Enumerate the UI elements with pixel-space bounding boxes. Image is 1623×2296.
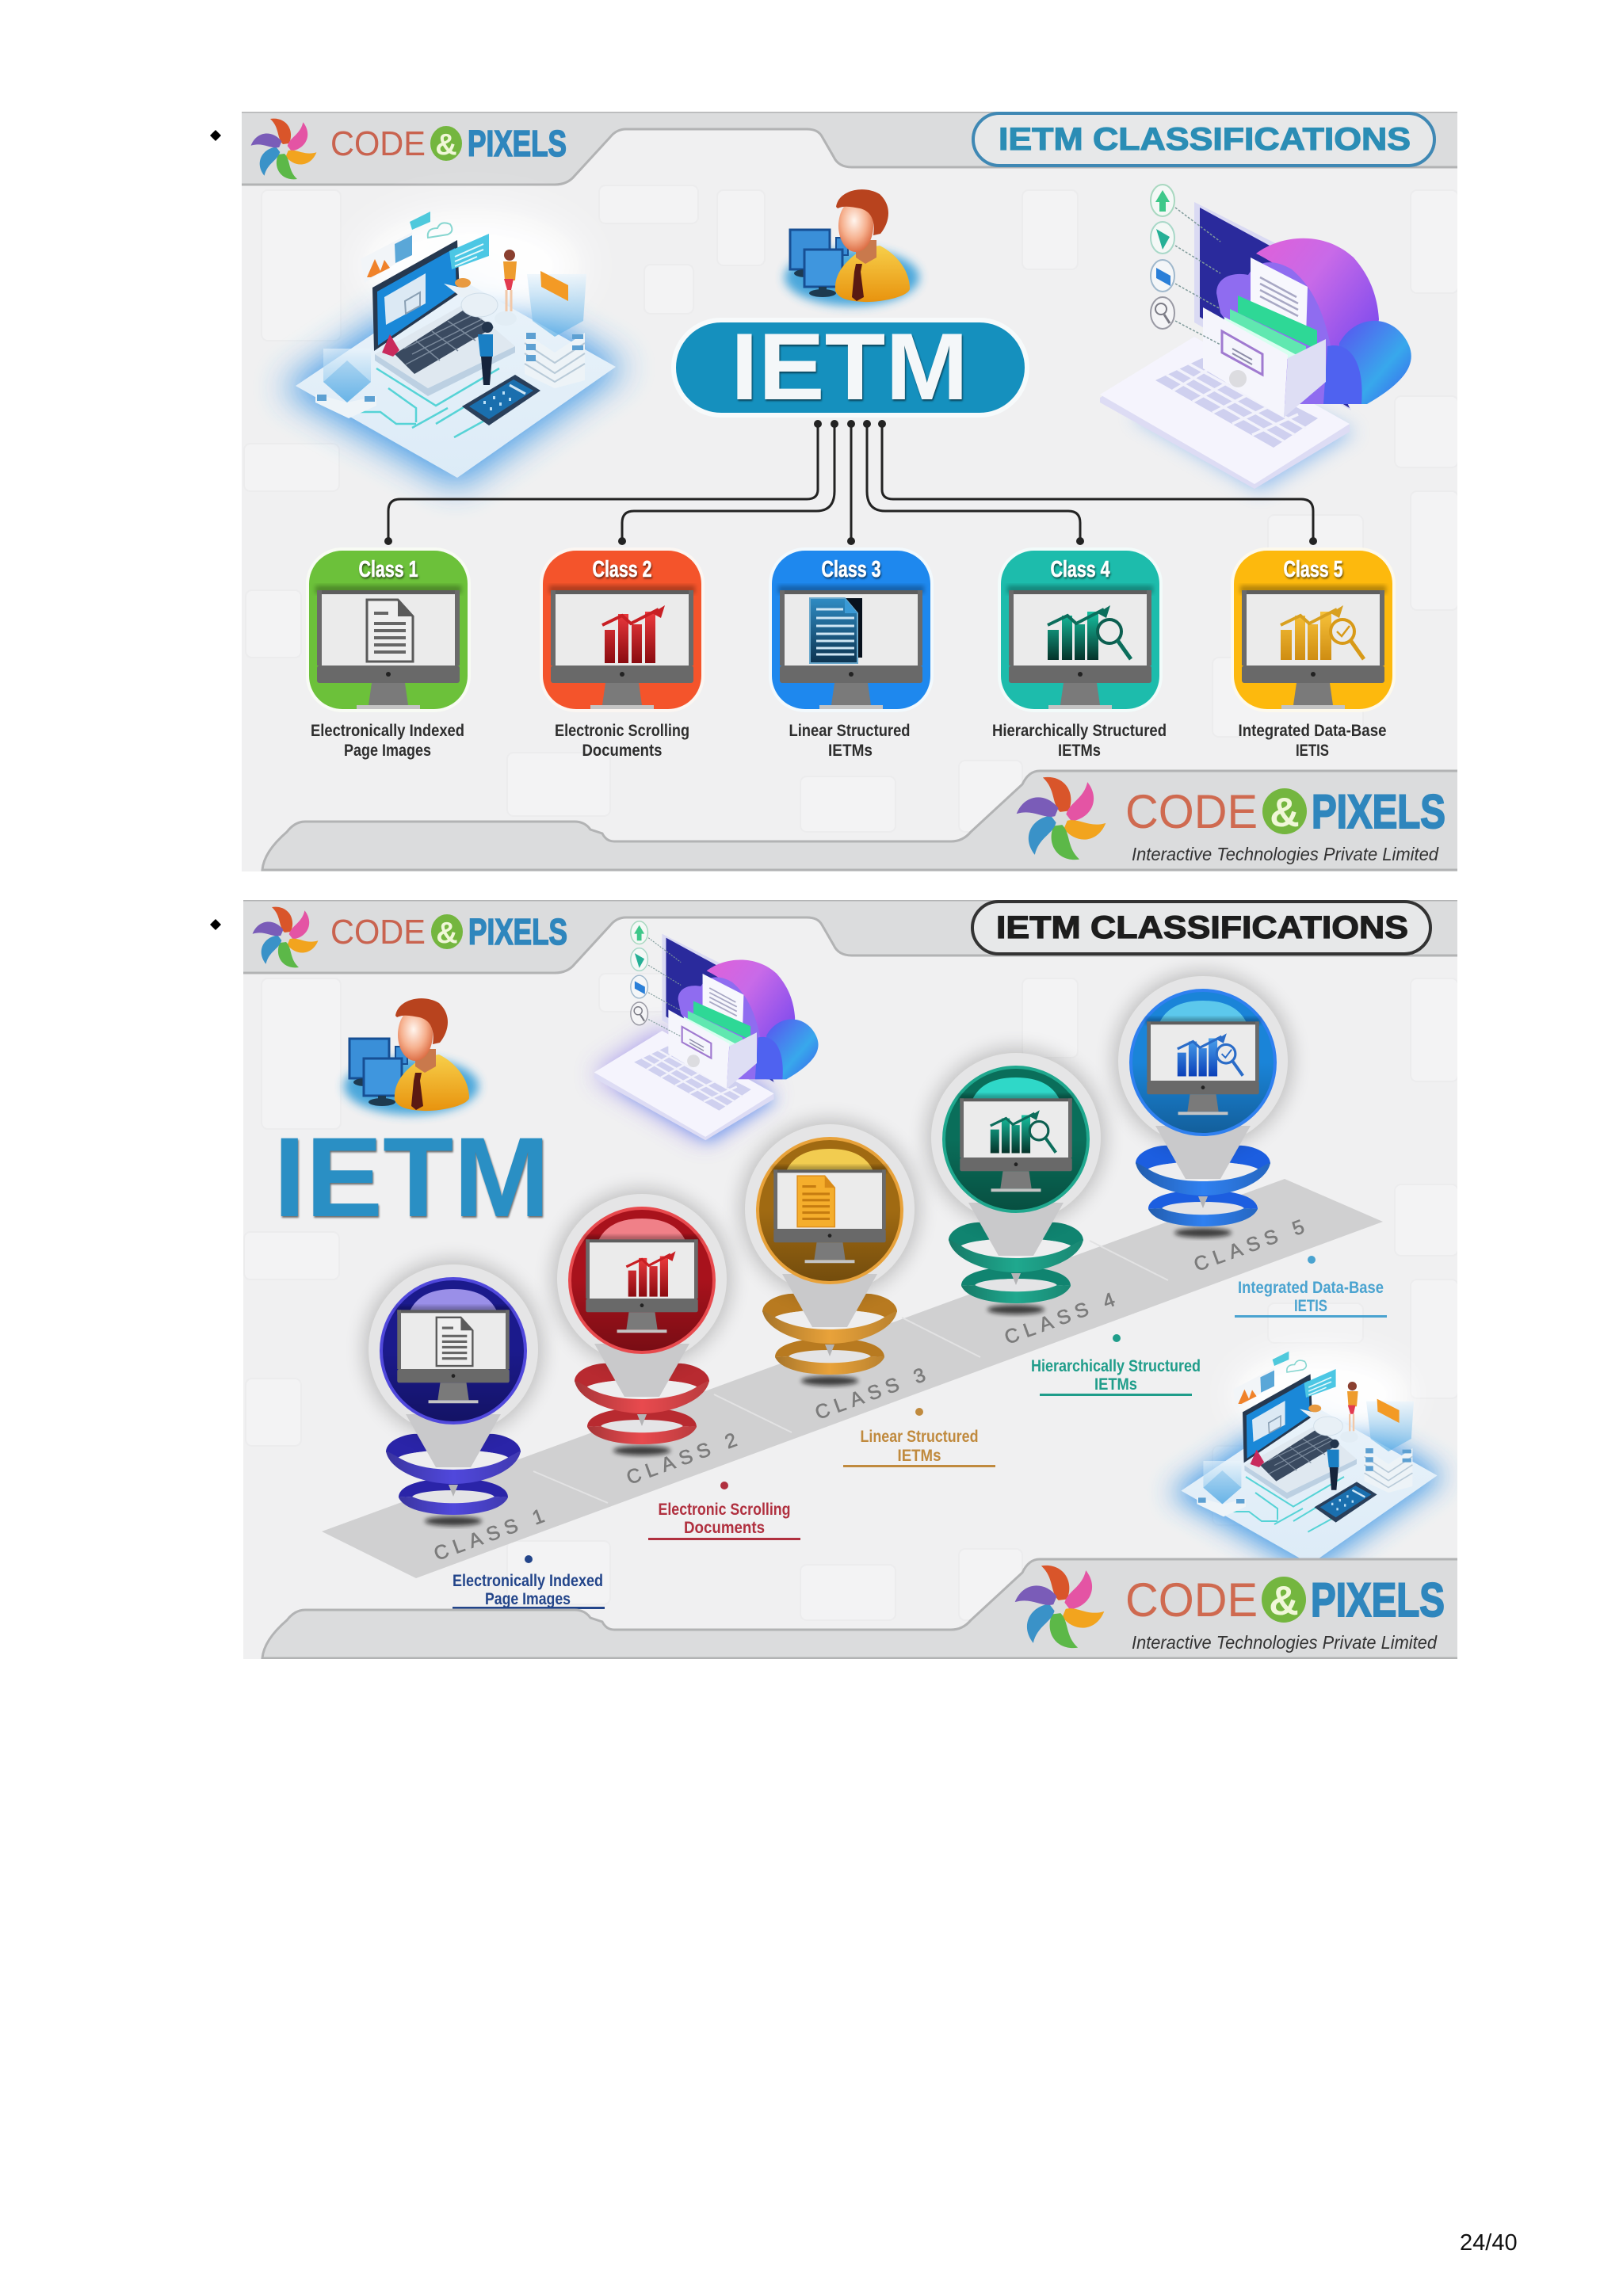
- panel: IETM class roadmap: [236, 900, 1466, 1659]
- label: CLASS 3: CLASS 3: [812, 1363, 929, 1425]
- logo: Code and Pixels footer: PIXELS: [1312, 785, 1445, 838]
- text: Class 3 description: IETMs: [828, 742, 873, 760]
- card: Class 4: [999, 549, 1161, 711]
- text: Class 2 callout: Electronic Scrolling: [658, 1501, 791, 1519]
- label: CLASS 2: CLASS 2: [624, 1428, 740, 1489]
- illustration: isometric laptop workspace: [1170, 1350, 1445, 1572]
- logo: Code and Pixels footer: PIXELS: [1311, 1573, 1445, 1627]
- text: Class 1 callout: Electronically Indexed: [453, 1572, 603, 1590]
- heading: IETM: IETM: [273, 1115, 550, 1241]
- pin: Class 4: [926, 1048, 1106, 1314]
- text: Class 3 callout: [843, 1408, 995, 1467]
- logo: Code and Pixels footer: [1014, 1566, 1445, 1653]
- logo: Code and Pixels header: CODE: [330, 124, 426, 163]
- footer band: [262, 1559, 1466, 1658]
- pin: Class 1: [364, 1260, 543, 1526]
- text: Class 5 callout: IETIS: [1294, 1297, 1327, 1315]
- card: Class 2: [541, 549, 703, 711]
- title pill: IETM CLASSIFICATIONS: [999, 122, 1411, 157]
- text: Class 3 callout: Linear Structured: [861, 1428, 978, 1446]
- illustration: cloud file drawer laptop: [1100, 185, 1411, 491]
- text: Class 3 description: Linear Structured: [789, 722, 910, 740]
- pin: Class 3: [740, 1119, 919, 1386]
- illustration: cloud file drawer laptop: [594, 921, 819, 1142]
- text: Class 2 callout: Documents: [684, 1519, 765, 1537]
- text: Class 5 callout: Integrated Data-Base: [1238, 1279, 1384, 1297]
- text: Class 1 callout: Page Images: [485, 1590, 571, 1608]
- label: CLASS 4: CLASS 4: [1002, 1288, 1118, 1349]
- logo: Code and Pixels header: &: [435, 128, 457, 162]
- card: Class 1: Class 1: [358, 557, 418, 582]
- text: Class 1 description: Electronically Indexed: [311, 722, 464, 740]
- logo: Code and Pixels header: PIXELS: [468, 123, 567, 164]
- logo: Code and Pixels footer: &: [1270, 790, 1300, 836]
- pin: Class 5: [1113, 971, 1293, 1238]
- text: Class 2 description: Documents: [582, 742, 663, 760]
- logo: Code and Pixels header: [252, 907, 567, 967]
- panel: IETM classifications tree: [236, 112, 1466, 871]
- text: Class 4 callout: Hierarchically Structured: [1031, 1357, 1201, 1375]
- text: Class 2 description: Electronic Scrolling: [555, 722, 689, 740]
- title pill: [972, 902, 1430, 954]
- text: Class 1 description: Page Images: [344, 742, 431, 760]
- text: Class 2 callout: [648, 1482, 800, 1540]
- logo: Code and Pixels header: &: [436, 917, 458, 950]
- card: Class 3: [770, 549, 932, 711]
- icon: person with monitors: [785, 189, 919, 306]
- logo: Code and Pixels header: CODE: [330, 913, 426, 952]
- logo: Code and Pixels header: PIXELS: [468, 911, 567, 952]
- card: Class 3: Class 3: [821, 557, 881, 582]
- page number: 24/40: [1460, 2230, 1518, 2256]
- bullet: first slide: [210, 130, 221, 141]
- text: Class 4 callout: IETMs: [1094, 1375, 1137, 1394]
- bullet: second slide: [210, 919, 221, 930]
- logo: Code and Pixels footer: CODE: [1125, 1573, 1258, 1627]
- text: Class 5 description: IETIS: [1296, 742, 1329, 760]
- text: Class 4 callout: [1031, 1334, 1201, 1396]
- text: Class 4 description: Hierarchically Structured: [992, 722, 1167, 740]
- logo: Code and Pixels footer: [1016, 777, 1445, 864]
- title pill: IETM CLASSIFICATIONS: [996, 910, 1408, 945]
- card: Class 4: Class 4: [1051, 557, 1109, 582]
- IETM central pill: IETM: [731, 314, 968, 420]
- header band: [236, 900, 1466, 973]
- logo: Code and Pixels footer: Interactive Technologies Private Limited: [1132, 844, 1439, 864]
- footer band: [262, 771, 1466, 870]
- pin: Class 2: [552, 1189, 731, 1455]
- connector lines: [384, 420, 1317, 545]
- label: CLASS 1: CLASS 1: [431, 1505, 548, 1566]
- text: Class 3 description: [789, 724, 910, 756]
- text: Class 4 description: IETMs: [1058, 742, 1101, 760]
- text: Class 5 callout: [1235, 1256, 1387, 1318]
- header band: [236, 112, 1466, 185]
- card: Class 5: [1232, 549, 1394, 711]
- platform: class road: [322, 1179, 1383, 1578]
- text: Class 1 description: [311, 722, 464, 760]
- text: Class 4 description: [993, 724, 1166, 756]
- card: Class 1: [307, 549, 469, 711]
- card: Class 2: Class 2: [593, 557, 651, 582]
- illustration: isometric laptop workspace: [281, 210, 626, 487]
- text: Class 1 callout: [453, 1555, 605, 1609]
- text: Class 3 callout: IETMs: [897, 1447, 941, 1465]
- title pill: [973, 113, 1434, 166]
- logo: Code and Pixels header: [250, 119, 567, 179]
- text: Class 5 description: [1239, 724, 1386, 756]
- IETM central pill: [674, 314, 1027, 420]
- logo: Code and Pixels footer: &: [1269, 1578, 1299, 1624]
- logo: Code and Pixels footer: CODE: [1125, 785, 1258, 838]
- text: Class 5 description: Integrated Data-Base: [1238, 722, 1387, 740]
- logo: Code and Pixels footer: Interactive Technologies Private Limited: [1132, 1632, 1438, 1653]
- text: Class 2 description: [556, 724, 689, 756]
- icon: person with monitors: [344, 998, 479, 1115]
- label: CLASS 5: CLASS 5: [1191, 1215, 1308, 1276]
- card: Class 5: Class 5: [1284, 557, 1342, 582]
